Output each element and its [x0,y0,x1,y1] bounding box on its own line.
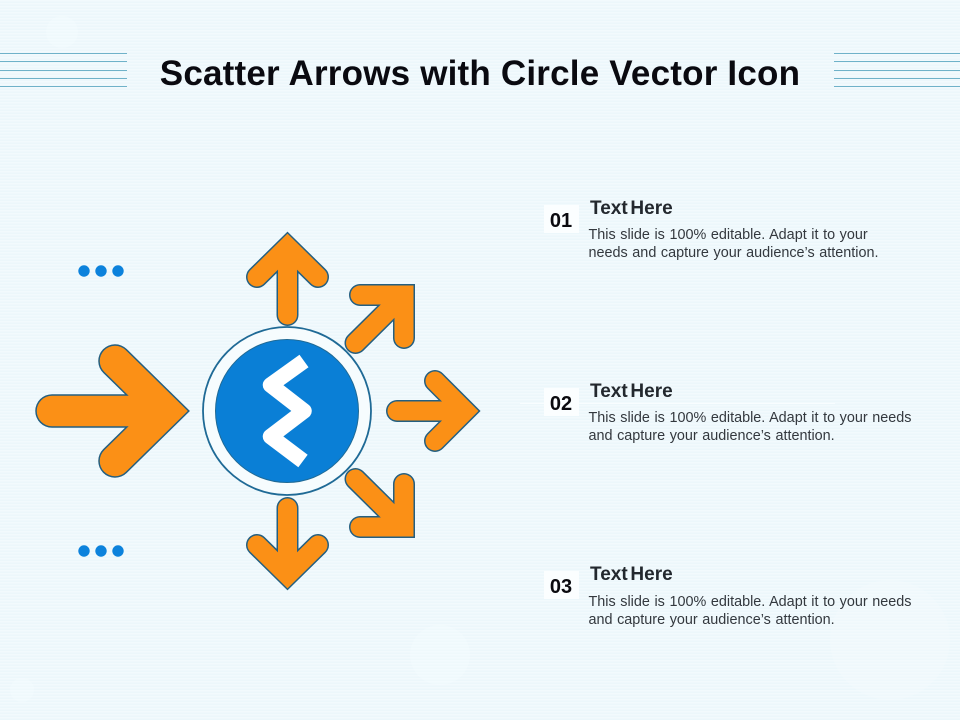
icon: right arrow [397,381,465,441]
number badge 02 [544,388,579,416]
icon: up arrow [257,247,318,315]
number badge 01 [544,205,579,233]
icon: central circle with zigzag [203,327,371,495]
heading 01: Text Here [590,198,673,219]
description 02: This slide is 100% editable. Adapt it to your needs [588,410,911,426]
description 01: needs and capture your audience’s attention. [588,245,878,261]
number badge 01: 01 [550,210,572,232]
icon: down arrow [257,508,318,575]
icon: lower dots [78,545,124,557]
icon: large input arrow [52,361,166,461]
icon: upper dots [78,265,124,277]
icon: lower-right arrow [356,479,404,527]
heading 03: Text Here [590,564,673,585]
title: Scatter Arrows with Circle Vector Icon [160,54,800,93]
description 02: and capture your audience’s attention. [588,428,835,444]
item 02 [544,381,911,444]
description 01: This slide is 100% editable. Adapt it to your [588,227,868,243]
number badge 02: 02 [550,393,572,415]
description 03: This slide is 100% editable. Adapt it to your needs [588,594,911,610]
item 03 [544,564,911,628]
heading 02: Text Here [590,381,673,402]
description 03: and capture your audience’s attention. [588,612,835,628]
icon: upper-right arrow [356,295,404,343]
number badge 03 [544,571,579,599]
number badge 03: 03 [550,576,572,598]
item 01 [544,198,878,261]
